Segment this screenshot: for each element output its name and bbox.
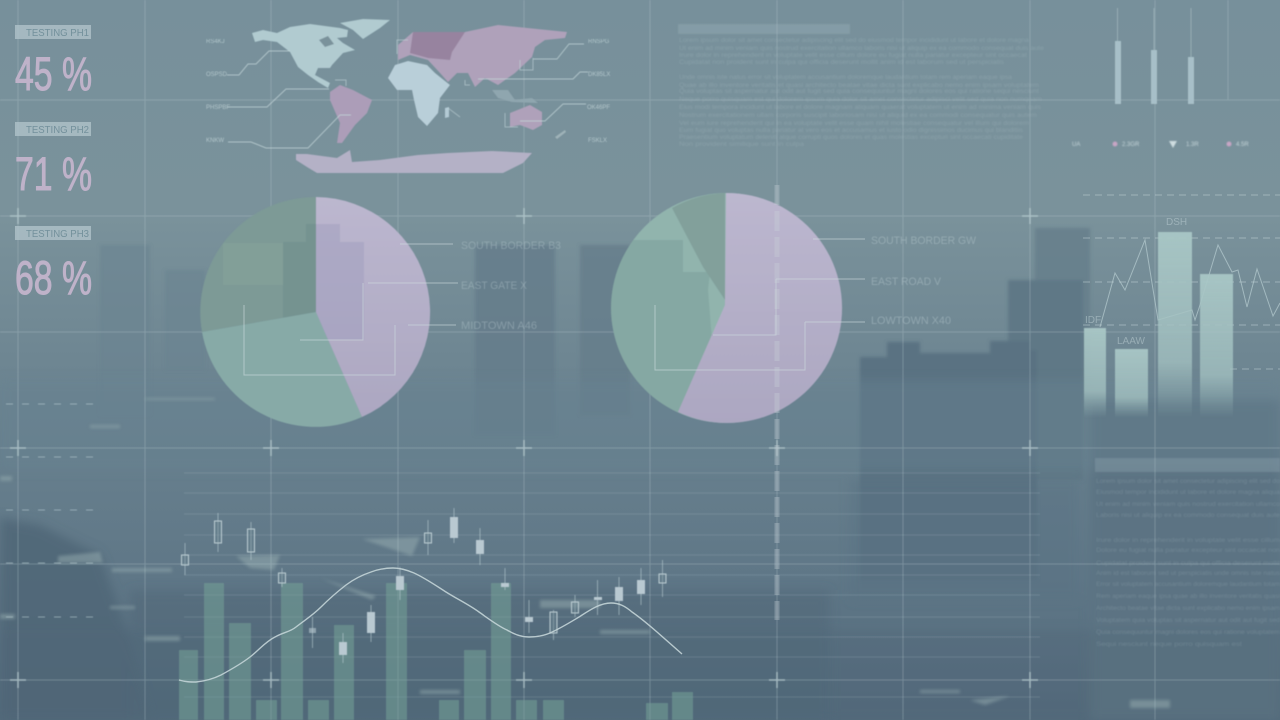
pie labels: [461, 240, 561, 332]
text block: lower right: Quia consequuntur magni dolores eos qui ratione voluptatem: [1096, 629, 1280, 636]
map: callout labels: OK46PF: [587, 105, 610, 111]
text block: lower right: Irure dolor in reprehenderit in voluptate velit esse cillum: [1096, 537, 1280, 544]
text block: lower right: Sequi nesciunt neque porro quisquam est: [1096, 641, 1242, 648]
pie slices: [600, 193, 842, 423]
legend: top right: 1.3R: [1186, 142, 1199, 148]
dashed gridlines: [1083, 195, 1280, 369]
text block: top centre: Eius modi tempora incidunt ut labore et dolore magnam aliquam quaerat voluptatem ut enim ad minima veniam quis: [679, 104, 1042, 111]
hollow candles: [182, 521, 666, 633]
text block: lower right: Eiusmod tempor incididunt ut labore et dolore magna aliqua: [1096, 489, 1280, 496]
pie callout lines: [655, 239, 865, 370]
text block: top centre: Irure dolor in reprehenderit in voluptate velit esse cillum dolore eu fugiat nulla pariatur excepteur sint occaecat: [679, 52, 1027, 59]
bar labels: IDF: [1085, 315, 1101, 326]
pie callout lines: [244, 244, 458, 375]
candle wicks: [185, 508, 662, 663]
text block: top centre: Non provident similique sunt in culpa: [679, 141, 804, 148]
text block: lower right: Architecto beatae vitae dicta sunt explicabo nemo enim ipsam: [1096, 605, 1280, 612]
candlestick chart: bottom: [182, 508, 666, 663]
map: continents: [252, 19, 567, 173]
bar and line chart: right: [1083, 195, 1280, 418]
stat: testing PH2: TESTING PH2: [26, 125, 89, 136]
stat: testing PH1: [15, 25, 92, 100]
map: callout labels: DK85LX: [588, 72, 610, 78]
text block: lower right: Anim id est laborum sed ut perspiciatis unde omnis iste natus: [1096, 570, 1280, 577]
stat: testing PH2: 71 %: [15, 147, 92, 200]
text block: top centre: [678, 24, 1044, 148]
pie labels: SOUTH BORDER GW: [871, 235, 977, 247]
bar labels: DSH: [1166, 217, 1187, 228]
stat: testing PH2: [15, 122, 92, 200]
solid candles: [309, 517, 645, 655]
map: callout labels: [206, 39, 610, 144]
dashed vertical scanner line: [774, 185, 780, 620]
map: callout lines: [227, 40, 588, 148]
text block: top centre: Quae ab illo inventore veritatis et quasi architecto beatae vitae dicta sunt explicabo nemo enim ipsam voluptatem: [679, 82, 1040, 89]
text block: top centre: Praesentium voluptatum deleniti atque corrupti quos dolores et quas molestias excepturi sint occaecati cupiditate: [679, 134, 1023, 141]
pie labels: EAST ROAD V: [871, 276, 942, 288]
text block: top centre: Ut enim ad minim veniam quis nostrud exercitation ullamco laboris nisi ut aliquip ex ea commodo consequat duis aute: [679, 45, 1044, 52]
text block: top centre: Unde omnis iste natus error sit voluptatem accusantium doloremque laudantium totam rem aperiam eaque ipsa: [679, 74, 1012, 81]
pie labels: [871, 235, 977, 327]
text block: lower right: Error sit voluptatem accusantium doloremque laudantium totam: [1096, 581, 1280, 588]
pie labels: LOWTOWN X40: [871, 315, 951, 327]
stat: testing PH1: 45 %: [15, 47, 92, 100]
pie labels: SOUTH BORDER B3: [461, 240, 561, 252]
legend: top right: UA: [1072, 142, 1080, 148]
text block: lower right: Laboris nisi ut aliquip ex ea commodo consequat duis aute: [1096, 512, 1280, 519]
map: callout labels: FSKLX: [588, 138, 607, 144]
text block: lower right: Ut enim ad minim veniam quis nostrud exercitation ullamco: [1096, 501, 1280, 508]
smooth trend line: [179, 568, 682, 682]
pie chart: right: [600, 193, 977, 423]
text block: top centre: Quia voluptas sit aspernatur aut odit aut fugit sed quia consequuntur magni dolores eos qui ratione sequi nesciunt: [679, 88, 1039, 95]
bar labels: [1085, 217, 1187, 347]
text block: top centre: Lorem ipsum dolor sit amet consectetur adipiscing elit sed do eiusmod tempor incididunt ut labore et dolore magna: [679, 37, 1029, 44]
text block: lower right: Cupidatat proident sunt in culpa qui officia deserunt mollit: [1096, 560, 1280, 567]
pie labels: MIDTOWN A46: [461, 320, 537, 332]
bar chart: bottom: [179, 583, 693, 720]
text block: lower right: Dolore eu fugiat nulla pariatur excepteur sint occaecat non: [1096, 547, 1280, 554]
text block: top centre: Cupidatat non proident sunt in culpa qui officia deserunt mollit anim id est laborum sed ut perspiciatis: [679, 59, 1005, 66]
legend: top right: 4.5R: [1236, 142, 1249, 148]
map: callout labels: OSPSD: [206, 72, 228, 78]
text block: top centre: Neque porro quisquam est qui dolorem ipsum quia dolor sit amet consectetur adipisci velit sed quia non numquam: [679, 96, 1043, 103]
text block: top centre: Eum fugiat quo voluptas nulla pariatur at vero eos et accusamus et iusto odio dignissimos ducimus qui blanditiis: [679, 127, 1024, 134]
map: callout labels: RS4KJ: [206, 39, 225, 45]
text block: lower right: Lorem ipsum dolor sit amet consectetur adipiscing elit sed do: [1096, 478, 1280, 485]
map: callout labels: PHSPBF: [206, 105, 230, 111]
panel: testing percentages: [15, 25, 92, 304]
text block: lower right: Voluptatem quia voluptas sit aspernatur aut odit aut fugit sed: [1096, 617, 1280, 624]
candlestick chart: top right: [1115, 8, 1194, 104]
text block: top centre: Nostrum exercitationem ullam corporis suscipit laboriosam nisi ut aliquid ex ea commodi consequatur quis autem: [679, 112, 1038, 119]
text block: lower right: Rem aperiam eaque ipsa quae ab illo inventore veritatis quasi: [1096, 593, 1280, 600]
legend: top right: [1072, 141, 1249, 148]
bars: [1084, 232, 1233, 418]
pie labels: EAST GATE X: [461, 280, 528, 292]
map: callout labels: RNSPG: [588, 39, 610, 45]
stat: testing PH1: TESTING PH1: [26, 28, 89, 39]
zigzag line: [1100, 240, 1280, 327]
text block: lower right: [1095, 458, 1280, 648]
stat: testing PH3: [15, 226, 92, 304]
bar labels: LAAW: [1117, 336, 1146, 347]
stat: testing PH3: TESTING PH3: [26, 229, 89, 240]
stat: testing PH3: 68 %: [15, 251, 92, 304]
legend: top right: 2.3GR: [1122, 142, 1140, 148]
pie slices: [200, 197, 430, 427]
world map with callouts: [206, 19, 610, 173]
text block: top centre: Vel eum iure reprehenderit qui in ea voluptate velit esse quam nihil molestiae consequatur vel illum qui dolorem: [679, 120, 1030, 127]
map: callout labels: KNKW: [206, 138, 224, 144]
pie chart: left: [200, 197, 561, 427]
